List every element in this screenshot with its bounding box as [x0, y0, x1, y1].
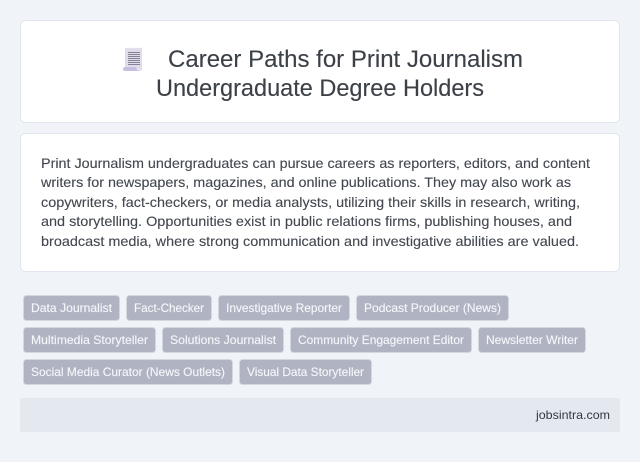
description text — [40, 155, 590, 249]
tag: Visual Data Storyteller — [247, 365, 364, 379]
tag — [240, 360, 372, 384]
tag — [126, 296, 212, 320]
tag: Solutions Journalist — [170, 333, 277, 347]
heading: Career Paths for Print Journalism — [168, 46, 523, 73]
tag — [24, 328, 156, 352]
footer — [20, 398, 620, 432]
footer source text: jobsintra.com — [535, 408, 610, 422]
panel: title — [20, 20, 620, 122]
tag: Community Engagement Editor — [298, 333, 464, 347]
icon: newspaper scroll — [123, 48, 142, 71]
panel: description — [20, 134, 620, 272]
tag: Data Journalist — [31, 301, 113, 315]
tag — [478, 328, 586, 352]
tag — [290, 328, 472, 352]
tag — [218, 296, 350, 320]
tag: Fact-Checker — [134, 301, 204, 315]
description text: copywriters, fact-checkers, or media analysts, utilizing their skills in research, writing, — [41, 194, 580, 210]
description text: and storytelling. Opportunities exist in public relations firms, publishing houses, and — [41, 213, 572, 229]
tag: Investigative Reporter — [226, 301, 342, 315]
tag — [24, 360, 232, 384]
tag — [356, 296, 508, 320]
description text: broadcast media, where strong communication and investigative abilities are valued. — [41, 233, 579, 249]
tags: career paths — [24, 296, 586, 384]
tag: Social Media Curator (News Outlets) — [31, 365, 225, 379]
description text: writers for newspapers, magazines, and online publications. They may also work as — [40, 174, 571, 190]
tag: Newsletter Writer — [486, 333, 578, 347]
tag: Podcast Producer (News) — [364, 301, 501, 315]
tag: Multimedia Storyteller — [31, 333, 148, 347]
tag — [24, 296, 120, 320]
tag — [162, 328, 284, 352]
heading — [156, 46, 523, 102]
description text: Print Journalism undergraduates can pursue careers as reporters, editors, and content — [41, 155, 590, 171]
heading: Undergraduate Degree Holders — [156, 75, 484, 102]
